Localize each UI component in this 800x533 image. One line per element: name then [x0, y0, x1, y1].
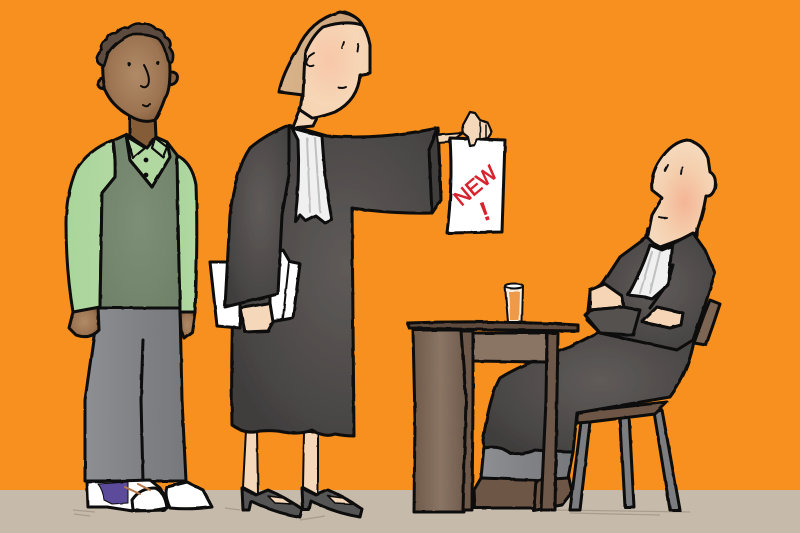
judge: near shoe	[474, 478, 536, 508]
lawyer: neck	[292, 108, 318, 128]
lawyer: gown body and arm	[232, 125, 441, 436]
man: hair	[97, 24, 173, 66]
chair	[570, 300, 720, 510]
judge: hand right	[642, 307, 683, 328]
female lawyer	[210, 12, 505, 517]
man: vest	[100, 134, 180, 308]
hand holding paper	[463, 112, 492, 146]
man: shirt collar	[126, 134, 170, 187]
man: face	[128, 62, 159, 106]
lawyer: wrist	[437, 133, 463, 143]
floor	[0, 490, 800, 533]
standing young man	[66, 24, 212, 511]
table	[407, 322, 578, 512]
lawyer: hanging sleeve	[225, 125, 289, 307]
man: right sleeve	[176, 155, 197, 312]
man: left sleeve	[66, 140, 115, 312]
lawyer: hair	[279, 12, 362, 95]
judge: head	[647, 140, 715, 247]
man: neck	[130, 112, 156, 150]
glass of beer	[505, 284, 523, 322]
lawyer: legs	[243, 430, 318, 495]
judge: torso and crossed arm	[587, 233, 715, 350]
man: left hand	[69, 306, 99, 337]
the NEW paper	[447, 112, 505, 233]
lawyer: head	[296, 12, 370, 118]
man: ears	[98, 72, 177, 89]
lawyer: right hand with papers	[240, 303, 273, 332]
lawyer: sleeve opening	[429, 128, 441, 213]
judge: sleeve crease	[650, 265, 673, 308]
judge: jabot	[628, 245, 672, 299]
judge: gown skirt	[483, 320, 695, 454]
lawyer: papers under arm	[210, 250, 300, 328]
man: trousers	[85, 308, 186, 481]
lawyer: white jabot	[292, 128, 332, 223]
floor scuffs	[73, 508, 690, 520]
man: right hand	[180, 312, 195, 338]
lawyer: face	[306, 42, 358, 88]
man: head	[103, 27, 170, 121]
judge: far shoe	[533, 474, 572, 510]
judge: left forearm sleeve	[585, 307, 640, 335]
judge: grey trousers	[481, 446, 573, 482]
judge: neck	[645, 218, 698, 252]
NEW label: NEW	[450, 161, 502, 211]
man: sneakers	[87, 480, 212, 511]
exclamation mark: !	[476, 196, 494, 227]
judge: hand left	[590, 284, 624, 310]
seated judge	[407, 140, 720, 512]
judge: face	[659, 165, 682, 218]
lawyer: shoes	[242, 488, 362, 517]
